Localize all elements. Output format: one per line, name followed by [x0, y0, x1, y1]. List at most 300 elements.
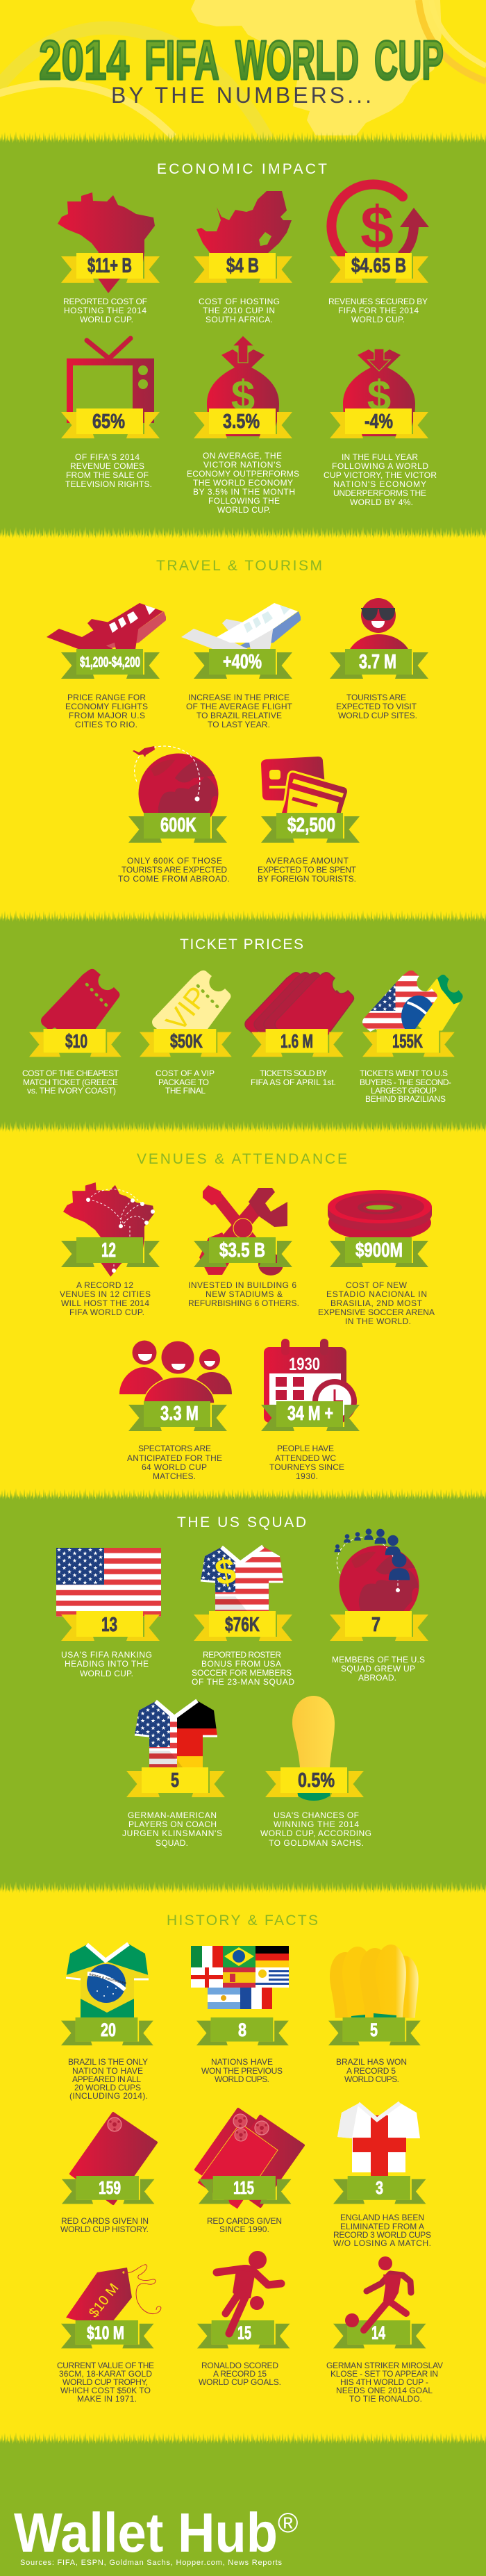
- caption: ELIMINATED FROM A: [340, 2222, 424, 2231]
- caption: THE WORLD ECONOMY: [193, 478, 293, 488]
- caption: ECONOMY OUTPERFORMS: [187, 469, 299, 479]
- stat: stadium investment: [188, 1185, 299, 1308]
- icon: England shirt: [337, 2103, 420, 2178]
- stat: Brazil appearances: [61, 1944, 153, 2101]
- caption: IN THE FULL YEAR: [342, 452, 418, 462]
- icon: money bag with down arrow: $: [367, 372, 391, 420]
- stat: England eliminated: [333, 2103, 431, 2248]
- title: [39, 29, 444, 91]
- caption: PACKAGE TO: [158, 1078, 209, 1087]
- caption: OF FIFA'S 2014: [75, 452, 140, 462]
- stat: venues: [60, 1182, 160, 1317]
- caption: RED CARDS GIVEN: [207, 2216, 282, 2226]
- icon: circular dollar arrow: [331, 184, 429, 261]
- panel: venues and attendance: [0, 1120, 486, 1500]
- icon: credit cards: [261, 757, 349, 818]
- stat: roster bonus: [192, 1546, 294, 1687]
- ribbon: [362, 1029, 455, 1057]
- value: 3.3 M: [160, 1403, 199, 1425]
- caption: ESTADIO NACIONAL IN: [326, 1289, 427, 1299]
- icon: crowd of people: [119, 1341, 232, 1403]
- caption: HOSTING THE 2014: [64, 306, 146, 315]
- caption: CITIES TO RIO.: [75, 720, 137, 729]
- icon: Brazil shirt: ORDEM E PROGRESSO: [89, 1972, 126, 1985]
- ribbon: [261, 1401, 360, 1431]
- caption: TO GOLDMAN SACHS.: [269, 1838, 364, 1848]
- icon: television: [67, 338, 154, 423]
- caption: [328, 297, 428, 324]
- title: WORLD: [235, 29, 359, 91]
- caption: CURRENT VALUE OF THE: [57, 2361, 154, 2370]
- icon: trophy: [292, 1696, 335, 1801]
- icon: USA ticket: [362, 971, 438, 1037]
- caption: FOLLOWING A WORLD: [332, 461, 428, 471]
- ribbon: [199, 2176, 291, 2204]
- caption: JURGEN KLINSMANN'S: [122, 1828, 222, 1838]
- caption: TICKETS WENT TO U.S: [360, 1068, 448, 1078]
- caption: WORLD CUP.: [217, 505, 271, 515]
- caption: [122, 1810, 222, 1848]
- ribbon: [328, 2017, 421, 2045]
- value: $3.5 B: [219, 1239, 265, 1262]
- caption: REVENUES SECURED BY: [328, 297, 428, 306]
- caption: [118, 856, 230, 884]
- stat: grew up abroad: [330, 1528, 428, 1683]
- caption: NATION'S ECONOMY: [333, 479, 426, 489]
- caption: SINCE 1990.: [219, 2224, 269, 2234]
- caption: VENUES IN 12 CITIES: [60, 1289, 151, 1299]
- caption: EXPECTED TO BE SPENT: [258, 865, 357, 875]
- caption: [60, 1280, 151, 1317]
- value: $4 B: [226, 254, 259, 277]
- panel: travel and tourism: [0, 526, 486, 922]
- ribbon: [333, 2320, 426, 2348]
- value: 3.5%: [223, 411, 260, 433]
- ribbon: [330, 408, 428, 438]
- value: 12: [101, 1239, 116, 1262]
- caption: INCREASE IN THE PRICE: [188, 693, 290, 702]
- caption: [61, 1650, 152, 1678]
- ribbon: [261, 813, 360, 843]
- ribbon: [29, 1029, 122, 1057]
- caption: COST OF A VIP: [156, 1068, 215, 1078]
- icon: stadium: [328, 1190, 432, 1241]
- value: 3: [376, 2177, 383, 2198]
- heading: HISTORY & FACTS: [167, 1913, 318, 1929]
- ribbon: [194, 1611, 292, 1641]
- value: 159: [99, 2177, 121, 2198]
- caption: [127, 1444, 222, 1481]
- caption: MATCHES.: [153, 1471, 196, 1481]
- caption: EXPENSIVE SOCCER ARENA: [318, 1307, 435, 1317]
- stat: red cards all time: [60, 2113, 156, 2234]
- value: 600K: [160, 814, 196, 836]
- caption: WORLD CUP.: [80, 1669, 133, 1678]
- caption: WORLD CUPS.: [215, 2074, 269, 2084]
- icon: VIP ticket: [152, 971, 231, 1037]
- caption: REPORTED COST OF: [63, 297, 147, 306]
- caption: TELEVISION RIGHTS.: [65, 479, 152, 489]
- ribbon: [196, 2017, 289, 2045]
- stat: FIFA ranking: [56, 1548, 161, 1678]
- caption: NATIONS HAVE: [211, 2057, 273, 2067]
- caption: WINNING THE 2014: [274, 1819, 359, 1829]
- ribbon: [330, 1237, 428, 1267]
- caption: SOUTH AFRICA.: [206, 315, 273, 324]
- caption: [63, 297, 147, 324]
- caption: FIFA FOR THE 2014: [338, 306, 419, 315]
- value: 5: [370, 2020, 378, 2040]
- caption: COST OF THE CHEAPEST: [22, 1068, 119, 1078]
- caption: 36CM, 18-KARAT GOLD: [59, 2369, 152, 2379]
- panel: the US squad: [0, 1487, 486, 1893]
- ribbon: [330, 1611, 428, 1641]
- background arcs: [0, 0, 486, 139]
- stat: victor underperforms: [324, 349, 437, 507]
- icon: red ticket: [41, 969, 119, 1035]
- stat: FIFA revenues: [328, 184, 429, 324]
- caption: A RECORD 15: [213, 2369, 267, 2379]
- caption: WON THE PREVIOUS: [201, 2066, 283, 2076]
- ribbon: [194, 408, 292, 438]
- value: $2,500: [287, 814, 335, 836]
- caption: COST OF HOSTING: [199, 297, 280, 306]
- icon: USA shirt with dollar: $: [212, 1551, 239, 1594]
- background map of Brazil: [191, 0, 442, 135]
- caption: WORLD CUP TROPHY,: [62, 2377, 148, 2387]
- panel: history and facts: [0, 1881, 486, 2444]
- stat: Brazil wins: [328, 1945, 421, 2084]
- value: 20: [101, 2020, 116, 2040]
- caption: EXPECTED TO VISIT: [336, 702, 417, 711]
- caption: [188, 1280, 299, 1308]
- caption: WORLD BY 4%.: [350, 497, 413, 507]
- caption: [192, 1650, 294, 1687]
- icon: USA shirt with dollar: [200, 1545, 283, 1611]
- stat: tickets to US buyers: [360, 971, 464, 1104]
- caption: LARGEST GROUP: [371, 1086, 437, 1096]
- caption: AVERAGE AMOUNT: [266, 856, 349, 866]
- value: -4%: [364, 411, 393, 433]
- caption: UNDERPERFORMS THE: [333, 488, 426, 498]
- caption: WORLD CUP.: [351, 315, 405, 324]
- icon: red plane: [47, 603, 166, 650]
- ribbon: [61, 2320, 153, 2348]
- icon: price tag: $10 M: [86, 2281, 122, 2320]
- heading: TRAVEL & TOURISM: [156, 558, 322, 574]
- caption: A RECORD 12: [76, 1280, 133, 1290]
- value: $1,200-$4,200: [80, 654, 140, 670]
- caption: WILL HOST THE 2014: [61, 1298, 149, 1308]
- caption: IN THE WORLD.: [345, 1316, 411, 1326]
- panel: footer: [0, 2431, 486, 2576]
- icon: Brazil ticket behind: [418, 975, 463, 1031]
- ribbon: [140, 1029, 232, 1057]
- icon: USA flag: [56, 1548, 161, 1617]
- panel: economic impact: [0, 131, 486, 538]
- caption: [65, 452, 152, 489]
- caption: TICKETS SOLD BY: [260, 1068, 327, 1078]
- value: $4.65 B: [351, 254, 406, 277]
- stat: chances of winning: [260, 1696, 371, 1848]
- caption: [22, 1068, 119, 1096]
- caption: BRAZIL HAS WON: [336, 2057, 407, 2067]
- caption: THE 2010 CUP IN: [203, 306, 275, 315]
- caption: [333, 2213, 431, 2248]
- caption: PEOPLE HAVE: [277, 1444, 334, 1453]
- value: 0.5%: [298, 1769, 335, 1792]
- caption: SQUAD.: [156, 1838, 188, 1848]
- caption: [336, 2057, 407, 2084]
- heading: THE US SQUAD: [177, 1514, 306, 1530]
- caption: SOCCER FOR MEMBERS: [192, 1668, 292, 1678]
- stat: new stadium cost: [318, 1190, 435, 1326]
- caption: THE FINAL: [165, 1086, 206, 1096]
- value: 14: [371, 2322, 385, 2343]
- value: $10: [65, 1030, 87, 1052]
- ribbon: [61, 649, 160, 679]
- caption: TOURNEYS SINCE: [269, 1462, 344, 1472]
- ribbon: [61, 2017, 153, 2045]
- caption: NEW STADIUMS &: [206, 1289, 283, 1299]
- stat: flight price increase: [181, 603, 301, 729]
- caption: USA'S FIFA RANKING: [61, 1650, 152, 1660]
- title: 2014: [39, 29, 129, 91]
- icon: white plane: [181, 603, 301, 650]
- ribbon: [330, 253, 428, 283]
- stat: tourists from abroad: [118, 746, 230, 884]
- caption: FROM THE SALE OF: [66, 470, 149, 480]
- icon: VIP ticket: VIP: [159, 980, 214, 1037]
- icon: Brazil shirt: [66, 1944, 149, 2018]
- icon: red card: [71, 2113, 156, 2204]
- caption: [269, 1444, 344, 1481]
- caption: FIFA AS OF APRIL 1st.: [251, 1078, 336, 1087]
- caption: GERMAN STRIKER MIROSLAV: [326, 2361, 443, 2370]
- caption: NEEDS ONE 2014 GOAL: [336, 2386, 433, 2395]
- icon: money bag with up arrow: [207, 336, 279, 436]
- ribbon: [330, 649, 428, 679]
- subtitle: BY THE NUMBERS...: [111, 83, 371, 108]
- stat: winning nations: [191, 1946, 289, 2084]
- caption: SPECTATORS ARE: [138, 1444, 211, 1453]
- icon: money bag with up arrow: $: [231, 372, 255, 420]
- caption: [318, 1280, 435, 1326]
- caption: 1930.: [296, 1471, 318, 1481]
- caption: [65, 693, 148, 729]
- value: 155K: [392, 1030, 423, 1052]
- value: $900M: [355, 1239, 403, 1262]
- value: $11+ B: [87, 254, 132, 277]
- value: $50K: [170, 1030, 203, 1052]
- icon: footballer with ball: [217, 2251, 281, 2334]
- caption: TOURISTS ARE EXPECTED: [122, 865, 227, 875]
- stat: trophy value: [57, 2265, 161, 2404]
- caption: [258, 856, 357, 884]
- stat: Ronaldo goals: [197, 2251, 290, 2387]
- panel: ticket prices: [0, 909, 486, 1132]
- ribbon: [61, 1611, 160, 1641]
- caption: COST OF NEW: [346, 1280, 408, 1290]
- caption: TO TIE RONALDO.: [349, 2394, 422, 2404]
- caption: [186, 693, 293, 729]
- caption: HIS 4TH WORLD CUP -: [340, 2377, 428, 2387]
- caption: A RECORD 5: [346, 2066, 396, 2076]
- panel: header: [0, 0, 486, 143]
- caption: [324, 452, 437, 507]
- icon: price tag: [66, 2265, 161, 2329]
- caption: [360, 1068, 451, 1104]
- value: 65%: [92, 411, 125, 433]
- heading: TICKET PRICES: [180, 936, 303, 952]
- icon: calendar with clock: 1930: [289, 1355, 320, 1374]
- value: 3.7 M: [359, 651, 396, 673]
- icon: Brazil map: [58, 192, 155, 293]
- caption: RONALDO SCORED: [201, 2361, 278, 2370]
- caption: OF THE 23-MAN SQUAD: [192, 1677, 294, 1687]
- stat: spending: [258, 757, 360, 884]
- caption: [60, 2216, 149, 2234]
- stat: red cards since 1990: [196, 2109, 303, 2234]
- value: $76K: [225, 1614, 260, 1636]
- icon: footballer kicking ball: [345, 2256, 411, 2330]
- logo: Wallet Hub: ®: [278, 2508, 298, 2538]
- caption: BONUS FROM USA: [201, 1659, 281, 1669]
- heading: ECONOMIC IMPACT: [157, 161, 327, 177]
- stat: tourists: [330, 598, 428, 720]
- stat: cost of hosting 2014: [58, 192, 160, 324]
- caption: (INCLUDING 2014).: [69, 2091, 148, 2101]
- caption: APPEARED IN ALL: [72, 2074, 141, 2084]
- sources: Sources: FIFA, ESPN, Goldman Sachs, Hopper.com, News Reports: [20, 2559, 282, 2567]
- caption: REVENUE COMES: [70, 461, 144, 471]
- ribbon: [61, 408, 160, 438]
- caption: TO LAST YEAR.: [208, 720, 270, 729]
- caption: ATTENDED WC: [275, 1453, 336, 1463]
- icon: globe with players: [335, 1528, 419, 1626]
- value: 34 M +: [287, 1403, 333, 1425]
- stat: attendance: [261, 1339, 360, 1481]
- caption: MATCH TICKET (GREECE: [23, 1078, 118, 1087]
- ribbon: [194, 253, 292, 283]
- icon: flags of winning nations: [191, 1946, 289, 2009]
- caption: ONLY 600K OF THOSE: [127, 856, 222, 866]
- ribbon: [128, 1401, 227, 1431]
- caption: WORLD CUP SITES.: [338, 711, 417, 720]
- stat: cost of 2010 cup: [194, 191, 292, 324]
- caption: TO BRAZIL RELATIVE: [196, 711, 282, 720]
- caption: BRAZIL IS THE ONLY: [68, 2057, 148, 2067]
- caption: [57, 2361, 154, 2404]
- ribbon: [333, 2176, 426, 2204]
- caption: ON AVERAGE, THE: [203, 451, 282, 461]
- heading: VENUES & ATTENDANCE: [137, 1151, 347, 1167]
- ribbon: [126, 1767, 225, 1797]
- caption: NATION TO HAVE: [72, 2066, 143, 2076]
- icon: five trophies: [330, 1945, 419, 2019]
- caption: [251, 1068, 336, 1087]
- caption: BRASILIA, 2ND MOST: [330, 1298, 423, 1308]
- caption: [332, 1655, 425, 1683]
- stat: TV rights: [61, 338, 160, 489]
- icon: South Africa map: [196, 191, 292, 254]
- caption: OF THE AVERAGE FLIGHT: [186, 702, 293, 711]
- caption: FIFA WORLD CUP.: [69, 1307, 144, 1317]
- value: 115: [233, 2177, 254, 2198]
- caption: vs. THE IVORY COAST): [27, 1086, 116, 1096]
- stat: flight price range: [47, 603, 166, 729]
- icon: ticket stack: [245, 973, 354, 1039]
- stat: cheapest ticket: [22, 969, 122, 1096]
- value: 1.6 M: [280, 1030, 313, 1052]
- caption: [199, 297, 280, 324]
- ribbon: [61, 1237, 160, 1267]
- caption: BY 3.5% IN THE MONTH: [193, 487, 295, 497]
- caption: MEMBERS OF THE U.S: [332, 1655, 425, 1665]
- caption: WORLD CUP HISTORY.: [60, 2224, 149, 2234]
- caption: WORLD CUP, ACCORDING: [260, 1828, 371, 1838]
- ribbon: [128, 813, 227, 843]
- caption: W/O LOSING A MATCH.: [333, 2238, 431, 2248]
- caption: [336, 693, 417, 720]
- caption: KLOSE - SET TO APPEAR IN: [330, 2369, 438, 2379]
- caption: CUP VICTORY, THE VICTOR: [324, 470, 437, 480]
- stat: VIP package: [140, 971, 232, 1096]
- stat: tickets sold: [245, 973, 354, 1087]
- caption: [199, 2361, 281, 2387]
- stat: Klose goals: [326, 2256, 443, 2404]
- caption: PLAYERS ON COACH: [128, 1819, 217, 1829]
- icon: wrench and screwdriver: [199, 1185, 287, 1275]
- caption: INVESTED IN BUILDING 6: [188, 1280, 296, 1290]
- caption: BY FOREIGN TOURISTS.: [258, 874, 356, 884]
- caption: RED CARDS GIVEN IN: [61, 2216, 149, 2226]
- ribbon: [265, 1767, 364, 1797]
- caption: MAKE IN 1971.: [77, 2394, 137, 2404]
- caption: [201, 2057, 283, 2084]
- caption: FROM MAJOR U.S: [69, 711, 145, 720]
- value: 8: [238, 2020, 246, 2040]
- caption: TOURISTS ARE: [346, 693, 406, 702]
- icon: money bag with down arrow: [343, 349, 415, 436]
- value: 15: [237, 2322, 251, 2343]
- caption: 64 WORLD CUP: [142, 1462, 207, 1472]
- icon: USA Germany shirt: [135, 1701, 219, 1775]
- caption: [207, 2216, 282, 2234]
- caption: GERMAN-AMERICAN: [128, 1810, 217, 1820]
- caption: WORLD CUP GOALS.: [199, 2377, 281, 2387]
- ribbon: [62, 2176, 154, 2204]
- caption: 20 WORLD CUPS: [74, 2083, 141, 2092]
- caption: RECORD 3 WORLD CUPS: [333, 2230, 431, 2240]
- value: $10 M: [87, 2322, 124, 2343]
- caption: SQUAD GREW UP: [341, 1664, 415, 1674]
- caption: [326, 2361, 443, 2404]
- ribbon: [194, 1237, 292, 1267]
- caption: ANTICIPATED FOR THE: [127, 1453, 222, 1463]
- icon: person with sunglasses: [349, 598, 409, 650]
- title: FIFA: [144, 29, 219, 91]
- stat: victor economy: [187, 336, 299, 515]
- caption: [187, 451, 299, 515]
- caption: ABROAD.: [358, 1673, 396, 1683]
- caption: USA'S CHANCES OF: [274, 1810, 359, 1820]
- stat: German-American players: [122, 1701, 225, 1848]
- caption: REPORTED ROSTER: [203, 1650, 281, 1660]
- ribbon: [61, 253, 160, 283]
- stat: spectators: [119, 1341, 232, 1481]
- caption: REFURBISHING 6 OTHERS.: [188, 1298, 299, 1308]
